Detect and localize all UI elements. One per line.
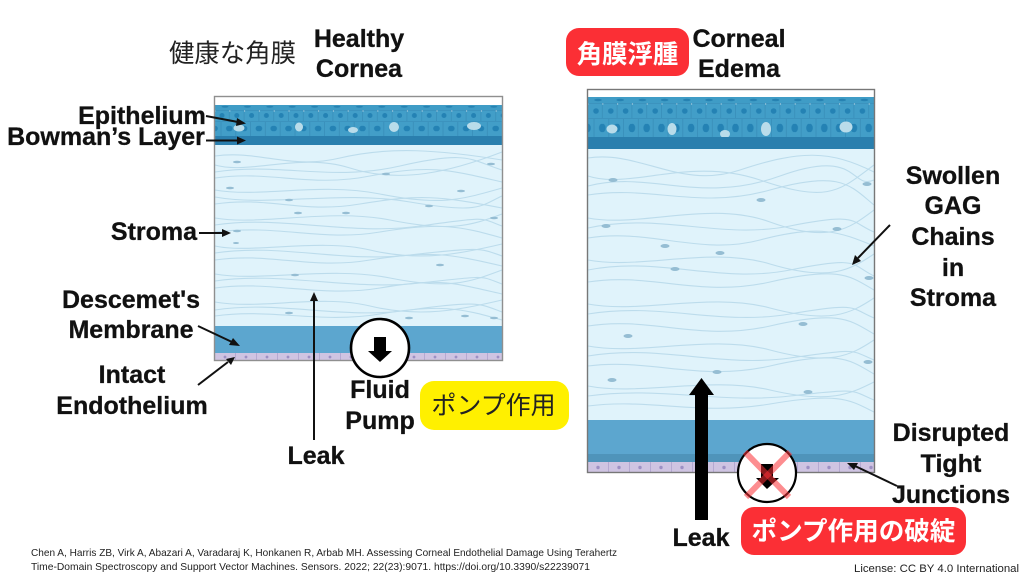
- epithelium bubbles: [606, 122, 852, 138]
- label: Swollen GAG Chains in Stroma: in: [942, 254, 964, 282]
- layer: endothelium: [215, 353, 502, 361]
- label: Intact Endothelium: Endothelium: [56, 392, 208, 420]
- arrow: intact endothelium: [198, 357, 235, 385]
- label: Disrupted Tight Junctions: Junctions: [892, 481, 1010, 509]
- arrow: leak healthy: [310, 292, 318, 440]
- layer: Descemet's membrane: [215, 326, 502, 353]
- citation: [31, 548, 617, 573]
- layer: disrupted junction band: [588, 454, 874, 462]
- title: Corneal Edema: Corneal: [692, 25, 786, 53]
- label: Epithelium: Epithelium: [78, 102, 206, 130]
- label: Bowman's Layer: Bowman’s Layer: [7, 123, 205, 151]
- stroma keratocytes: [602, 178, 874, 394]
- title: Corneal Edema: Edema: [698, 55, 781, 83]
- layer: stroma: [215, 145, 502, 326]
- label: Descemet's Membrane: Membrane: [68, 316, 194, 344]
- arrow: large leak: [689, 378, 714, 520]
- badge: Japanese corneal edema: [566, 28, 689, 76]
- panel: corneal edema diagram: [587, 89, 875, 473]
- label: Fluid Pump: [345, 376, 415, 435]
- label: Swollen GAG Chains in Stroma: [906, 162, 1000, 312]
- layer: swollen epithelium: [588, 97, 874, 137]
- title: Healthy Cornea: Healthy: [314, 25, 404, 53]
- citation: Chen A, Harris ZB, Virk A, Abazari A, Varadaraj K, Honkanen R, Arbab MH. Assessing Corneal Endothelial Damage Using Terahertz: [31, 548, 617, 559]
- arrow: Descemet's membrane: [198, 326, 240, 346]
- label: Disrupted Tight Junctions: Disrupted: [893, 419, 1009, 447]
- layer: Descemet's membrane: [588, 420, 874, 454]
- title: Corneal Edema: [692, 25, 786, 83]
- label: Swollen GAG Chains in Stroma: GAG: [925, 192, 981, 220]
- arrow: stroma: [199, 229, 231, 237]
- layer: swollen stroma: [588, 149, 874, 420]
- badge: pump failure: [741, 507, 966, 555]
- license: License: CC BY 4.0 International: [854, 563, 1019, 575]
- label: Disrupted Tight Junctions: Tight: [921, 450, 982, 478]
- stroma fibres: [215, 151, 502, 320]
- label: Intact Endothelium: Intact: [99, 361, 166, 389]
- epithelium bubbles: [234, 122, 481, 133]
- title: Japanese healthy cornea: 健康な角膜: [169, 40, 296, 68]
- badge: pump action: ポンプ作用: [431, 392, 556, 420]
- label: Fluid Pump: Pump: [345, 407, 415, 435]
- layer: endothelium: [588, 462, 874, 473]
- label: Leak (healthy): Leak: [288, 442, 345, 470]
- badge: Japanese corneal edema: 角膜浮腫: [577, 41, 678, 69]
- icon: fluid pump: [351, 319, 409, 377]
- label: Descemet's Membrane: Descemet's: [62, 286, 200, 314]
- arrow: disrupted tight junctions: [847, 463, 897, 486]
- stroma fibres: [588, 155, 874, 412]
- stroma keratocytes: [226, 161, 498, 319]
- badge: pump action: [420, 381, 569, 430]
- label: Leak (edema): Leak: [673, 524, 730, 552]
- label: Disrupted Tight Junctions: [892, 419, 1010, 509]
- label: Swollen GAG Chains in Stroma: Stroma: [910, 284, 997, 312]
- label: Swollen GAG Chains in Stroma: Swollen: [906, 162, 1000, 190]
- title: Healthy Cornea: [314, 25, 404, 83]
- arrow: epithelium: [206, 116, 246, 126]
- badge: pump failure: ポンプ作用の破綻: [752, 517, 956, 546]
- layer: Bowman's layer: [588, 137, 874, 149]
- layer: epithelium: [215, 105, 502, 136]
- label: Swollen GAG Chains in Stroma: Chains: [911, 223, 995, 251]
- label: Stroma: Stroma: [111, 218, 198, 246]
- panel: healthy cornea diagram: [214, 96, 503, 361]
- icon: broken pump: [738, 444, 796, 502]
- label: Descemet's Membrane: [62, 286, 200, 344]
- label: Intact Endothelium: [56, 361, 208, 420]
- citation: Time-Domain Spectroscopy and Support Vector Machines. Sensors. 2022; 22(23):9071. https://doi.org/10.3390/s22239071: [31, 562, 590, 573]
- arrow: swollen GAG chains: [852, 225, 890, 265]
- label: Fluid Pump: Fluid: [350, 376, 410, 404]
- layer: Bowman's layer: [215, 136, 502, 145]
- arrow: Bowman's layer: [206, 136, 246, 144]
- title: Healthy Cornea: Cornea: [316, 55, 403, 83]
